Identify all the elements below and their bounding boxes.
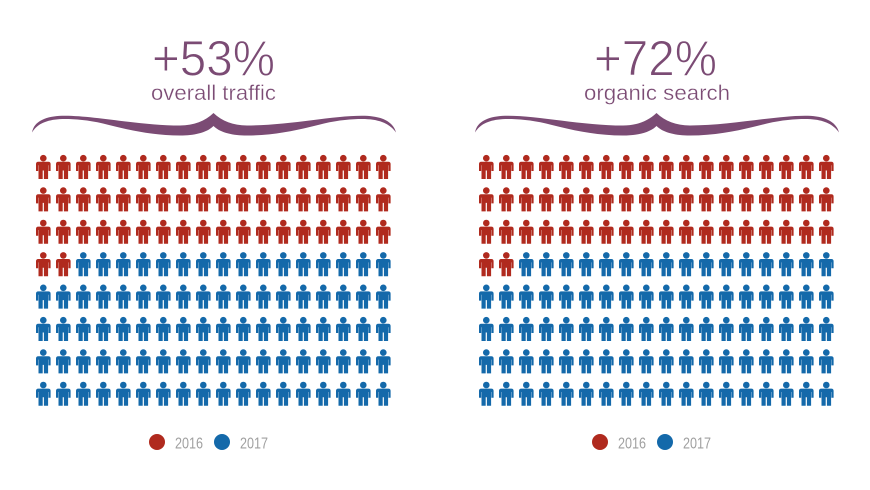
text: organic search: organic search: [584, 82, 730, 105]
legend: [149, 434, 268, 452]
heading: +53%: +53%: [152, 30, 275, 86]
legend: 2017: [240, 435, 268, 452]
legend: 2017: [683, 435, 711, 452]
brace: [32, 113, 396, 136]
panel: overall traffic: [32, 30, 396, 452]
brace: [475, 113, 839, 136]
heading: +72%: +72%: [594, 30, 717, 86]
legend: 2016: [175, 435, 203, 452]
pictogram chart: 2016 vs 2017 people: [479, 155, 834, 406]
panel: organic search: [475, 30, 839, 452]
text: overall traffic: overall traffic: [151, 82, 276, 105]
legend: [592, 434, 711, 452]
pictogram chart: 2016 vs 2017 people: [36, 155, 391, 406]
legend: 2016: [618, 435, 646, 452]
